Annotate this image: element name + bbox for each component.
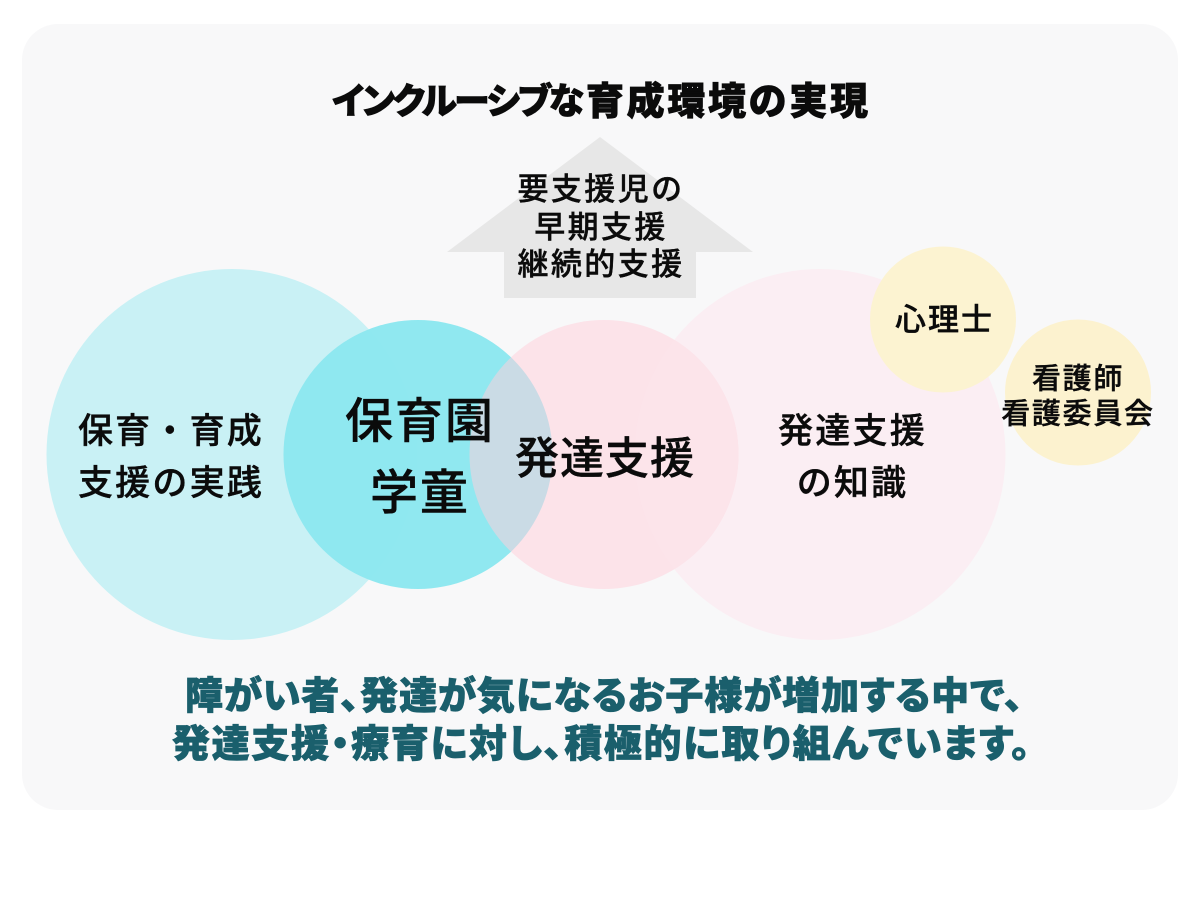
circle: nurse and nursing committee — [1001, 320, 1155, 466]
label: nursery and after-school care — [345, 396, 495, 520]
circle: psychologist — [870, 246, 1016, 392]
circle: psychologist: 心理士 — [895, 302, 994, 338]
circle: childcare practice — [46, 269, 418, 640]
arrow: upward with early support text: 要支援児の — [518, 172, 684, 207]
circle: developmental support knowledge: 発達支援 — [778, 412, 927, 451]
title: 育成環境の実現 — [586, 80, 868, 124]
label: nursery and after-school care: 学童 — [370, 467, 470, 520]
circle: childcare practice: 保育・育成 — [78, 412, 264, 451]
message text: 発達支援・療育に対し、積極的に取り組んでいます。 — [172, 724, 1030, 766]
message text — [172, 675, 1030, 766]
arrow: upward with early support text — [447, 137, 753, 298]
circle: developmental support knowledge — [634, 269, 1006, 640]
message text: 障がい者、発達が気になるお子様が増加する中で、 — [185, 675, 1023, 718]
title: インクルーシブな — [332, 80, 584, 122]
circle: developmental support — [470, 320, 738, 589]
circle: developmental support knowledge: の知識 — [797, 464, 908, 503]
title — [332, 80, 868, 124]
label: developmental support: 発達支援 — [515, 434, 695, 484]
label: nursery and after-school care: 保育園 — [345, 396, 495, 448]
circle: nursery and after-school care — [284, 320, 552, 589]
arrow: upward with early support text: 早期支援 — [534, 210, 668, 245]
circle: nurse and nursing committee: 看護師 — [1032, 362, 1124, 396]
circle: childcare practice: 支援の実践 — [78, 464, 264, 503]
arrow: upward with early support text: 継続的支援 — [518, 247, 684, 282]
circle: nurse and nursing committee: 看護委員会 — [1001, 398, 1155, 430]
